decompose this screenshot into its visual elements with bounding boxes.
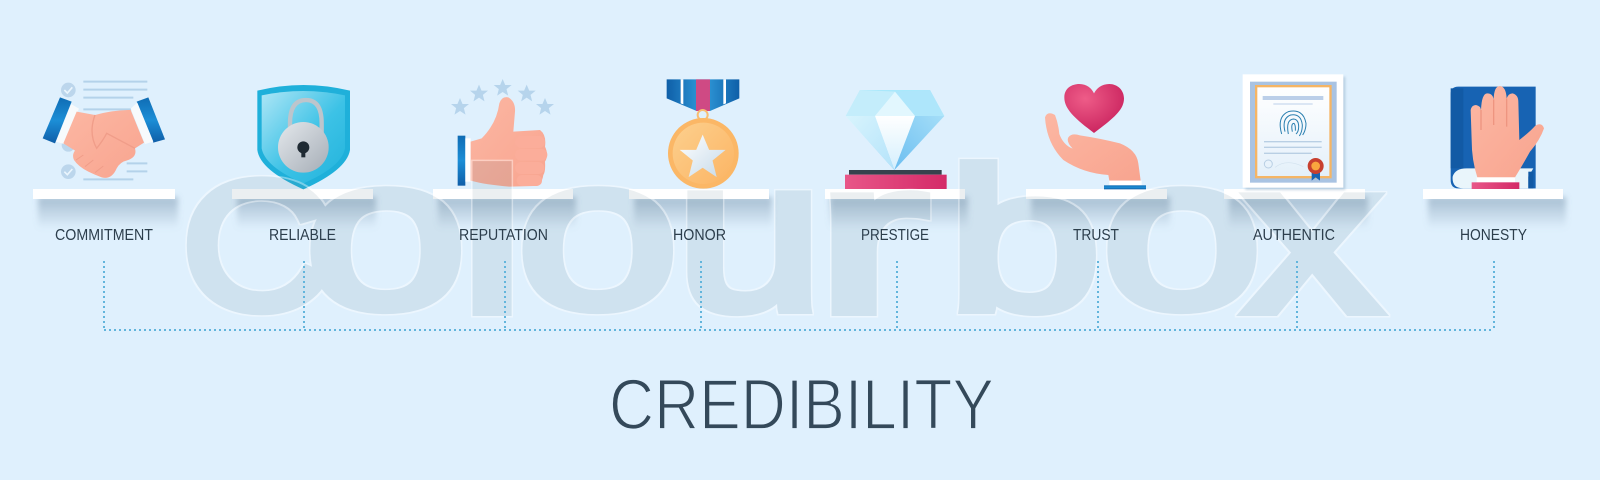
item labels: PRESTIGE xyxy=(861,227,929,244)
icon: handshake with document xyxy=(43,82,165,179)
icon: framed certificate with fingerprint xyxy=(1243,74,1345,190)
watermark: C xyxy=(182,144,331,348)
watermark: o xyxy=(517,112,678,353)
watermark: o xyxy=(1102,112,1262,353)
watermark: o xyxy=(305,112,466,353)
icon: shield with padlock xyxy=(257,85,350,189)
item labels: HONOR xyxy=(673,227,726,244)
item labels: TRUST xyxy=(1073,227,1119,244)
item labels: HONESTY xyxy=(1460,227,1527,244)
icon: thumbs up with stars xyxy=(451,79,554,187)
item labels: RELIABLE xyxy=(269,227,336,244)
title: CREDIBILITY xyxy=(609,366,994,445)
icon: hand holding heart xyxy=(1045,84,1146,189)
dotted connector bracket xyxy=(104,261,1494,330)
watermark: x xyxy=(1245,116,1380,357)
watermark xyxy=(182,112,1380,357)
icon: diamond on pedestal xyxy=(845,90,947,189)
watermark: b xyxy=(948,129,1101,352)
item labels xyxy=(55,227,1527,244)
icon: medal xyxy=(667,79,739,189)
icon: hand on book xyxy=(1451,86,1544,189)
shelves row xyxy=(33,189,1566,229)
item labels: AUTHENTIC xyxy=(1253,227,1335,244)
watermark: l xyxy=(460,131,524,354)
item labels: REPUTATION xyxy=(459,227,548,244)
item labels: COMMITMENT xyxy=(55,227,153,244)
watermark: r xyxy=(816,116,928,357)
watermark: u xyxy=(676,114,823,355)
